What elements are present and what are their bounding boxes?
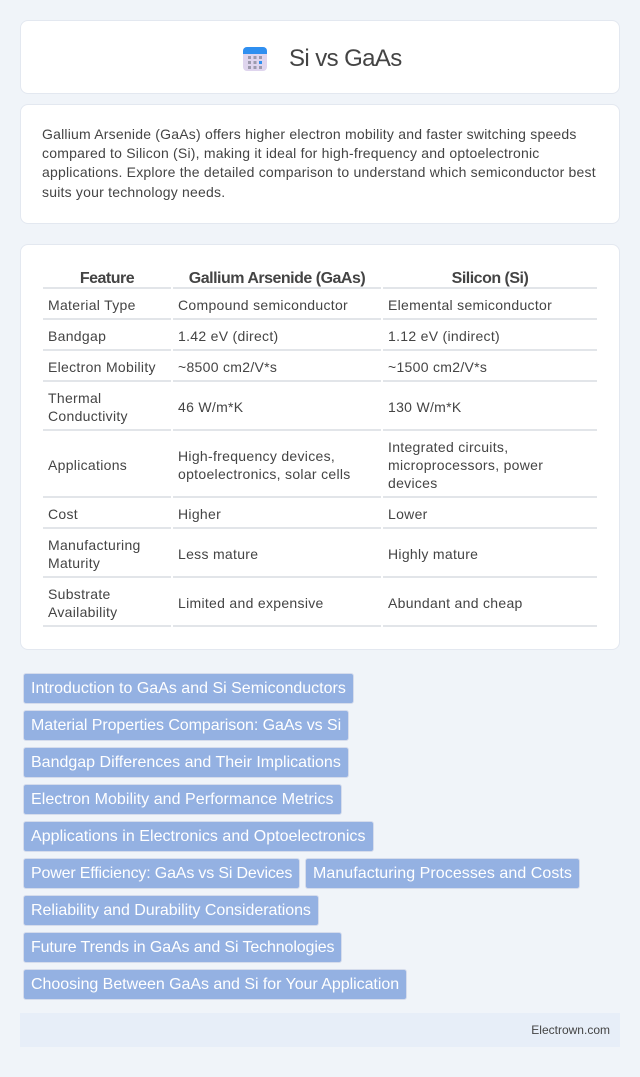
comparison table: Compound semiconductor [178, 296, 348, 312]
comparison table: Silicon (Si) [452, 270, 528, 287]
tag: reliability: Reliability and Durability Considerations [31, 902, 311, 919]
comparison table: Conductivity [48, 408, 128, 424]
tag: choosing: Choosing Between GaAs and Si for Your Application [31, 976, 399, 993]
comparison table [43, 270, 597, 627]
tag: manufacturing [305, 858, 580, 889]
intro text panel [20, 104, 620, 224]
comparison table: Cost [48, 506, 78, 522]
tag: future trends: Future Trends in GaAs and Si Technologies [31, 939, 334, 956]
comparison table: ~1500 cm2/V*s [388, 358, 487, 374]
comparison table: Material Type [48, 296, 136, 312]
icon: calendar [243, 47, 267, 71]
comparison table: 1.42 eV (direct) [178, 328, 279, 344]
tag: future trends [23, 932, 342, 963]
panel: comparison table [20, 244, 620, 650]
comparison table: Availability [48, 604, 118, 620]
comparison table: Abundant and cheap [388, 594, 523, 610]
comparison table: Manufacturing [48, 536, 141, 552]
comparison table: Highly mature [388, 546, 478, 562]
tag: electron mobility: Electron Mobility and Performance Metrics [31, 791, 334, 808]
comparison table: Limited and expensive [178, 594, 324, 610]
footer [20, 1013, 620, 1047]
comparison table: 46 W/m*K [178, 398, 243, 414]
comparison table: Less mature [178, 546, 258, 562]
tag: manufacturing: Manufacturing Processes and Costs [313, 865, 572, 882]
comparison table: Lower [388, 506, 428, 522]
tag: electron mobility [23, 784, 342, 815]
tag: applications: Applications in Electronics and Optoelectronics [31, 828, 366, 845]
tag: power efficiency [23, 858, 300, 889]
tag: introduction [23, 673, 354, 704]
comparison table: Feature [80, 270, 134, 287]
tag: bandgap [23, 747, 349, 778]
tag: applications [23, 821, 374, 852]
comparison table: Elemental semiconductor [388, 296, 552, 312]
comparison table: Maturity [48, 554, 100, 570]
comparison table: High-frequency devices, [178, 448, 335, 464]
comparison table: 1.12 eV (indirect) [388, 328, 500, 344]
comparison table: ~8500 cm2/V*s [178, 358, 277, 374]
header panel [20, 20, 620, 94]
comparison table: devices [388, 474, 438, 490]
footer: Electrown.com [531, 1023, 610, 1037]
title: Si vs GaAs [289, 45, 402, 72]
comparison table: microprocessors, power [388, 456, 543, 472]
comparison table: Substrate [48, 586, 111, 602]
comparison table: Thermal [48, 390, 101, 406]
comparison table: 130 W/m*K [388, 398, 462, 414]
tag: material properties: Material Properties Comparison: GaAs vs Si [31, 717, 341, 734]
comparison table: optoelectronics, solar cells [178, 466, 351, 482]
comparison table: Electron Mobility [48, 358, 156, 374]
tag: choosing [23, 969, 407, 1000]
comparison table: Bandgap [48, 328, 106, 344]
tag: reliability [23, 895, 319, 926]
tag: bandgap: Bandgap Differences and Their Implications [31, 754, 341, 771]
comparison table: Gallium Arsenide (GaAs) [189, 270, 365, 287]
tag: introduction: Introduction to GaAs and Si Semiconductors [31, 680, 346, 697]
tag: power efficiency: Power Efficiency: GaAs vs Si Devices [31, 865, 292, 882]
tag: material properties [23, 710, 349, 741]
comparison table: Higher [178, 506, 221, 522]
comparison table: Applications [48, 456, 127, 472]
comparison table: Integrated circuits, [388, 438, 508, 454]
intro paragraph: Gallium Arsenide (GaAs) offers higher electron mobility and faster switching speeds compared to Silicon (Si), making it ideal for high-frequency and optoelectronic applications. Explore the detailed comparison to understand which semiconductor best suits your technology needs. [42, 126, 596, 200]
